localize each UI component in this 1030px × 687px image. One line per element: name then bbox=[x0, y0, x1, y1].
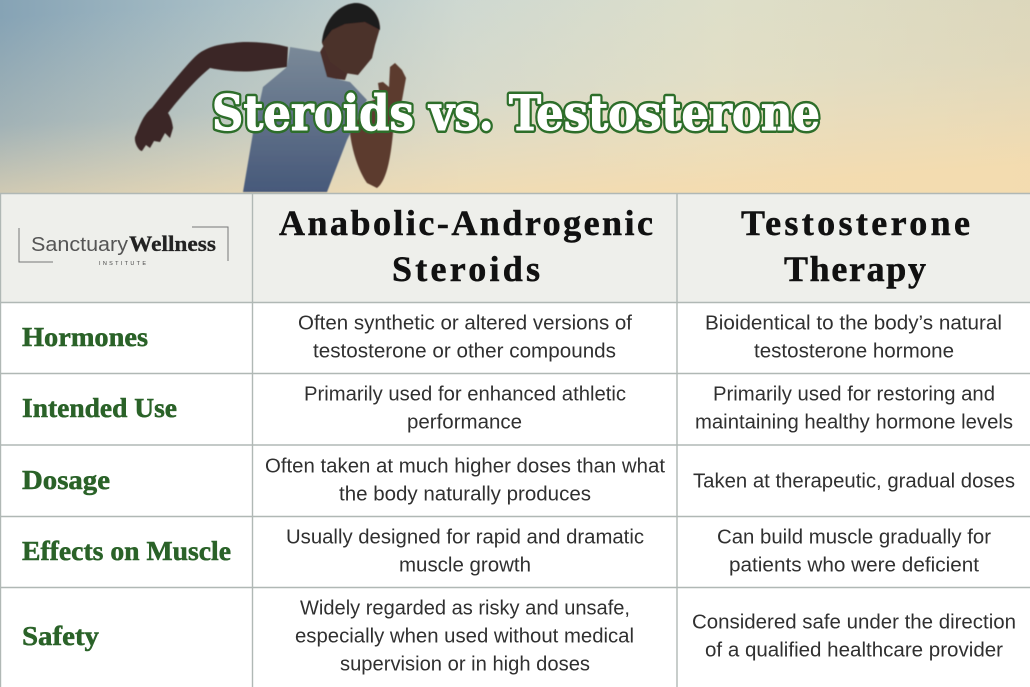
column heading: Testosterone Therapy: Therapy bbox=[784, 249, 926, 289]
row: Intended Use: Primarily used for restoring and bbox=[713, 384, 995, 406]
row: Intended Use: performance bbox=[407, 412, 522, 434]
row: Effects on Muscle: Can build muscle gradually for bbox=[717, 526, 991, 548]
row: Effects on Muscle: patients who were deficient bbox=[729, 554, 979, 576]
comparison table bbox=[0, 193, 1030, 687]
neck bbox=[320, 40, 352, 80]
row: Safety: supervision or in high doses bbox=[340, 654, 590, 676]
row: Dosage: the body naturally produces bbox=[339, 484, 591, 506]
row: Effects on Muscle: Effects on Muscle bbox=[22, 536, 231, 566]
row: Dosage: Often taken at much higher doses than what bbox=[265, 456, 665, 478]
logo: Sanctuary Wellness Institute: Wellness bbox=[129, 231, 216, 256]
column heading: Testosterone Therapy bbox=[741, 203, 970, 289]
column heading: Anabolic-Androgenic Steroids bbox=[279, 203, 653, 289]
logo: Sanctuary Wellness Institute: INSTITUTE bbox=[99, 261, 146, 267]
row: Effects on Muscle bbox=[22, 526, 991, 576]
title: Steroids vs. Testosterone bbox=[212, 84, 820, 142]
row: Safety bbox=[22, 598, 1016, 676]
rear arm bbox=[135, 42, 288, 151]
front arm and hand bbox=[350, 63, 406, 188]
row: Hormones: Often synthetic or altered versions of bbox=[298, 312, 632, 334]
table body background bbox=[0, 302, 1030, 687]
row: Safety: Considered safe under the direction bbox=[692, 612, 1016, 634]
head bbox=[322, 3, 380, 75]
title: Steroids vs. Testosterone bbox=[212, 84, 820, 142]
row: Hormones: testosterone hormone bbox=[754, 340, 954, 362]
column heading: Testosterone Therapy: Testosterone bbox=[741, 203, 970, 243]
row: Safety: Widely regarded as risky and unsafe, bbox=[300, 598, 630, 620]
runner photo silhouette bbox=[135, 3, 406, 192]
row: Intended Use bbox=[22, 384, 1013, 434]
logo: Sanctuary Wellness Institute bbox=[19, 227, 228, 267]
row: Safety: of a qualified healthcare provider bbox=[705, 640, 1003, 662]
row: Hormones: Hormones bbox=[22, 322, 148, 352]
row: Safety: especially when used without medical bbox=[295, 626, 634, 648]
row: Effects on Muscle: muscle growth bbox=[399, 554, 531, 576]
row: Effects on Muscle: Usually designed for rapid and dramatic bbox=[286, 526, 644, 548]
row: Hormones bbox=[22, 312, 1002, 362]
row: Dosage bbox=[22, 456, 1015, 506]
row: Intended Use: Primarily used for enhanced athletic bbox=[304, 384, 626, 406]
row: Hormones: Bioidentical to the body’s natural bbox=[705, 312, 1002, 334]
row: Dosage: Taken at therapeutic, gradual doses bbox=[693, 470, 1015, 492]
row: Hormones: testosterone or other compounds bbox=[313, 340, 616, 362]
table grid lines bbox=[0, 193, 1030, 687]
column heading: Anabolic-Androgenic Steroids: Steroids bbox=[392, 249, 540, 289]
row: Intended Use: maintaining healthy hormone levels bbox=[695, 412, 1013, 434]
hero photo background bbox=[0, 0, 1030, 193]
row: Intended Use: Intended Use bbox=[22, 393, 177, 423]
table header background bbox=[0, 193, 1030, 302]
logo: Sanctuary Wellness Institute: Sanctuary bbox=[31, 234, 128, 256]
row: Safety: Safety bbox=[22, 621, 100, 651]
shirt bbox=[243, 47, 367, 192]
row: Dosage: Dosage bbox=[22, 465, 110, 495]
hair bbox=[322, 3, 380, 43]
column heading: Anabolic-Androgenic Steroids: Anabolic-Androgenic bbox=[279, 203, 653, 243]
